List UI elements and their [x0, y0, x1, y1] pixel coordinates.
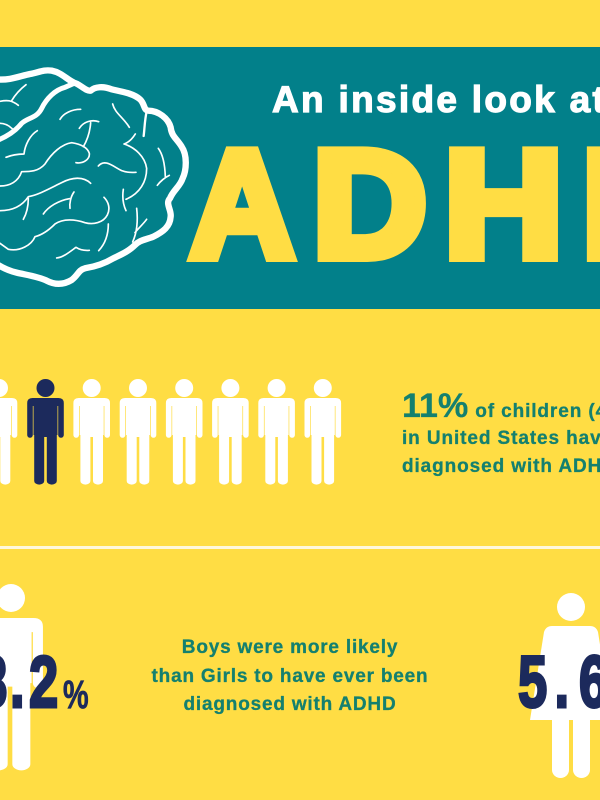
heading: ADHD: D [313, 119, 427, 289]
heading: ADHD: A [190, 120, 294, 289]
panel: boys vs girls [0, 584, 600, 778]
text: 11 percent statistic [402, 387, 600, 477]
icon: male figure [0, 584, 43, 770]
icon: female figure [530, 593, 600, 778]
text: boys statistic: % [63, 672, 89, 717]
title: An inside look at [272, 79, 600, 120]
text: boys statistic [0, 642, 89, 723]
text: boys and girls comparison [152, 637, 428, 715]
icon: brain [0, 70, 186, 284]
heading: ADHD: H [444, 118, 563, 289]
panel: header banner [0, 47, 600, 309]
text: boys and girls comparison: diagnosed with ADHD [184, 694, 396, 715]
text: boys and girls comparison: Boys were more likely [182, 637, 398, 658]
icon: row of people [0, 379, 341, 485]
panel: 11 percent row [0, 379, 600, 485]
heading: ADHD [190, 118, 600, 289]
divider [0, 546, 600, 549]
text: boys and girls comparison: than Girls to have ever been [152, 666, 428, 687]
